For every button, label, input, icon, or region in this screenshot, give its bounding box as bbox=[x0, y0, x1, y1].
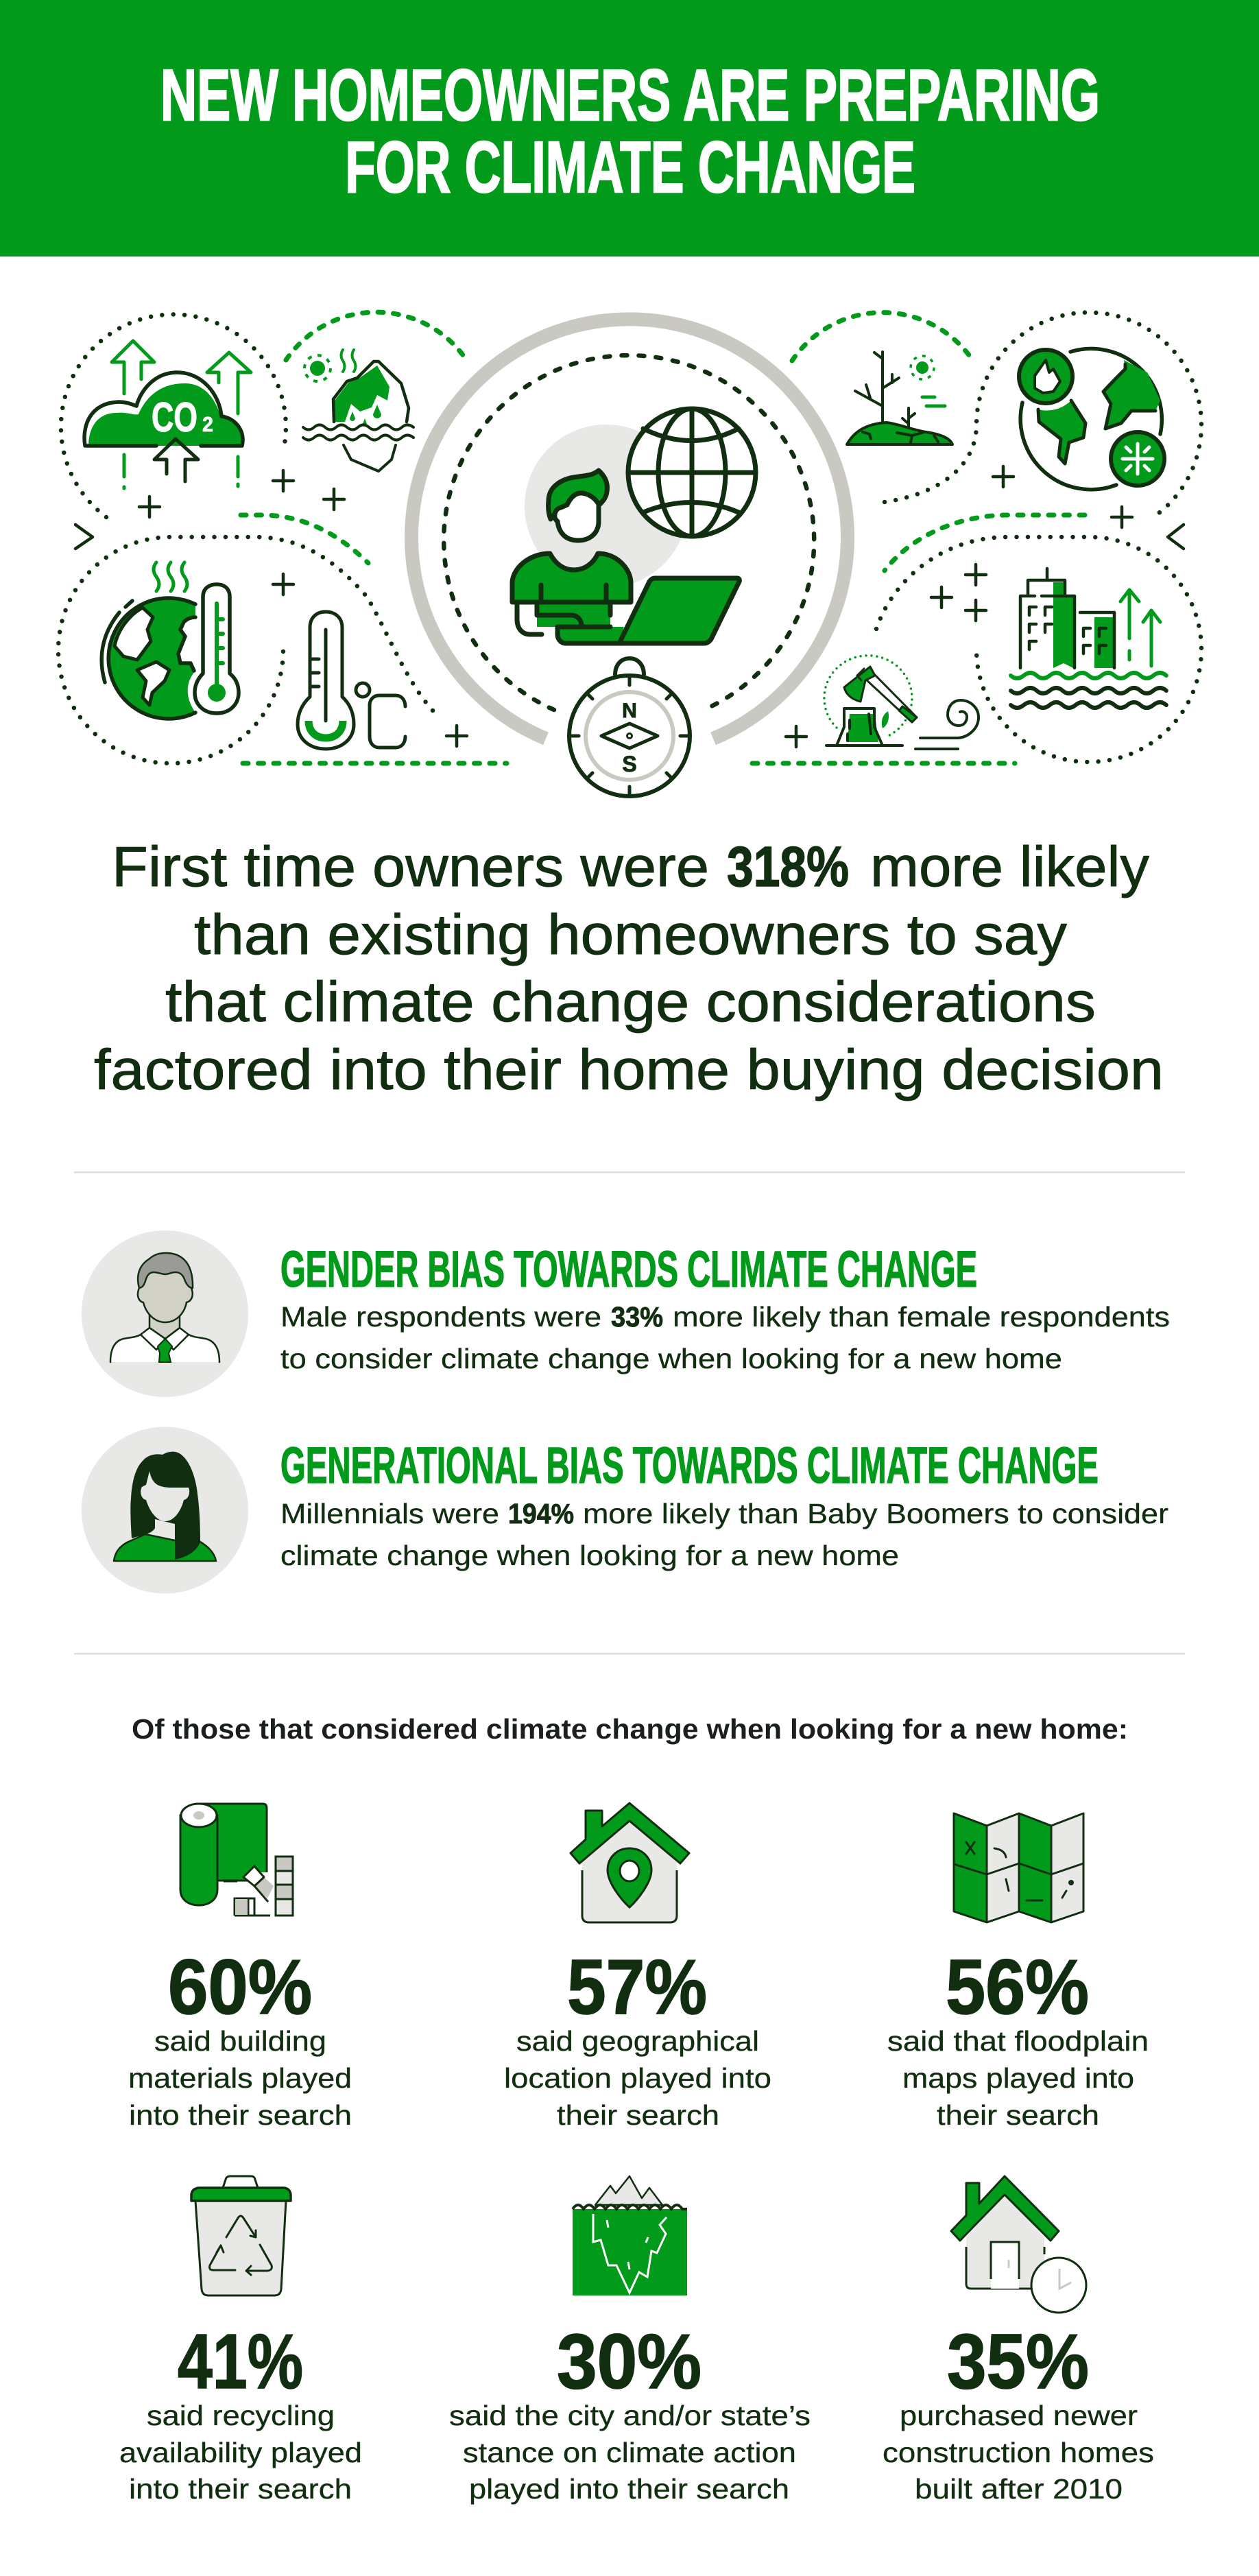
stat: 60% building materials bbox=[128, 1804, 352, 2131]
description bbox=[504, 2025, 771, 2131]
description bbox=[887, 2025, 1149, 2131]
panel: generational bias bbox=[82, 1427, 1168, 1594]
stat: 56% floodplain maps bbox=[887, 1813, 1149, 2131]
description: location played into bbox=[504, 2062, 771, 2094]
icon: compass: N bbox=[622, 700, 637, 722]
text block: 33% bbox=[611, 1301, 663, 1333]
stat: 41% recycling availability bbox=[119, 2176, 362, 2505]
text block: climate change when looking for a new home bbox=[280, 1540, 899, 1571]
stat: 30% city and state stance bbox=[449, 2176, 811, 2505]
description: said building bbox=[154, 2025, 326, 2057]
icon: woman avatar bbox=[82, 1427, 248, 1594]
icon: compass bbox=[569, 658, 690, 796]
icon: man avatar bbox=[82, 1230, 248, 1397]
headline statement: factored into their home buying decision bbox=[94, 1038, 1164, 1101]
description: said that floodplain bbox=[887, 2025, 1149, 2057]
value: 35% bbox=[947, 2318, 1089, 2405]
description: into their search bbox=[129, 2473, 352, 2505]
icon: compass: S bbox=[622, 752, 637, 776]
description bbox=[128, 2025, 352, 2131]
headline statement bbox=[94, 835, 1164, 1101]
description: said recycling bbox=[147, 2400, 335, 2431]
icon: thermometer and Celsius symbol bbox=[298, 612, 405, 749]
icon: earth with fire and snow badges bbox=[1019, 348, 1164, 490]
description: built after 2010 bbox=[915, 2473, 1123, 2505]
stat: 57% geographical location bbox=[504, 1803, 771, 2131]
icon: house with location pin bbox=[571, 1803, 689, 1922]
headline statement: 318% bbox=[727, 835, 849, 898]
icon: CO2 cloud with arrows: CO bbox=[152, 394, 197, 440]
text block bbox=[280, 1498, 1168, 1571]
section intro heading: Of those that considered climate change when looking for a new home: bbox=[132, 1713, 1128, 1745]
headline statement: than existing homeowners to say bbox=[194, 903, 1068, 966]
icon: dead trees on dry ground bbox=[847, 352, 952, 444]
description: maps played into bbox=[902, 2062, 1134, 2094]
text block: to consider climate change when looking for a new home bbox=[280, 1343, 1062, 1374]
icon: CO2 cloud with arrows bbox=[84, 341, 251, 488]
value: 30% bbox=[557, 2318, 702, 2405]
icon: person at laptop bbox=[512, 470, 739, 643]
description bbox=[883, 2400, 1154, 2505]
description: played into their search bbox=[469, 2473, 789, 2505]
headline statement: more likely bbox=[870, 835, 1149, 898]
panel: gender bias bbox=[82, 1230, 1170, 1397]
description: said the city and/or state’s bbox=[449, 2400, 811, 2431]
description bbox=[119, 2400, 362, 2505]
icon: wireframe globe bbox=[628, 409, 756, 536]
value: 56% bbox=[946, 1944, 1089, 2030]
description: their search bbox=[937, 2099, 1099, 2131]
icon: house with clock bbox=[951, 2176, 1086, 2313]
icon: axe in tree stump with wind swirl bbox=[824, 656, 979, 749]
header banner with title bbox=[0, 0, 1259, 257]
text block: 194% bbox=[508, 1498, 574, 1529]
value: 60% bbox=[168, 1944, 312, 2030]
icon: warming earth with thermometer bbox=[101, 562, 239, 719]
value: 41% bbox=[178, 2318, 303, 2405]
icon: material roll and swatches bbox=[180, 1804, 293, 1916]
description: into their search bbox=[129, 2099, 352, 2131]
text block bbox=[280, 1301, 1170, 1374]
icon: CO2 cloud with arrows: 2 bbox=[202, 412, 213, 436]
right dotted loops and green dashed connectors bbox=[752, 313, 1201, 763]
icon: iceberg bbox=[573, 2176, 687, 2295]
stat: 35% newer construction bbox=[883, 2176, 1154, 2505]
header banner with title: FOR CLIMATE CHANGE bbox=[345, 127, 915, 208]
text block: Millennials were bbox=[280, 1498, 499, 1529]
description: said geographical bbox=[516, 2025, 759, 2057]
description: purchased newer bbox=[900, 2400, 1138, 2431]
headline statement: that climate change considerations bbox=[165, 970, 1096, 1034]
description: their search bbox=[557, 2099, 719, 2131]
value: 57% bbox=[567, 1944, 707, 2030]
description: materials played bbox=[128, 2062, 352, 2094]
icon: flooded city with rising arrows bbox=[1011, 569, 1166, 708]
left dotted loops and green dashed connectors bbox=[58, 312, 507, 763]
decorative plus signs and chevrons bbox=[75, 466, 1184, 747]
text block: Male respondents were bbox=[280, 1301, 601, 1333]
description: stance on climate action bbox=[463, 2437, 796, 2468]
icon: recycling bin bbox=[191, 2176, 291, 2295]
description bbox=[449, 2400, 811, 2505]
text block: more likely than female respondents bbox=[673, 1301, 1170, 1333]
headline statement: First time owners were bbox=[112, 835, 709, 898]
description: construction homes bbox=[883, 2437, 1154, 2468]
central illustration: rings, person, globe, laptop, compass bbox=[411, 319, 848, 796]
icon: folded map bbox=[954, 1813, 1083, 1922]
icon: melting iceberg bbox=[303, 350, 413, 471]
text block: more likely than Baby Boomers to consider bbox=[583, 1498, 1168, 1529]
description: availability played bbox=[119, 2437, 362, 2468]
